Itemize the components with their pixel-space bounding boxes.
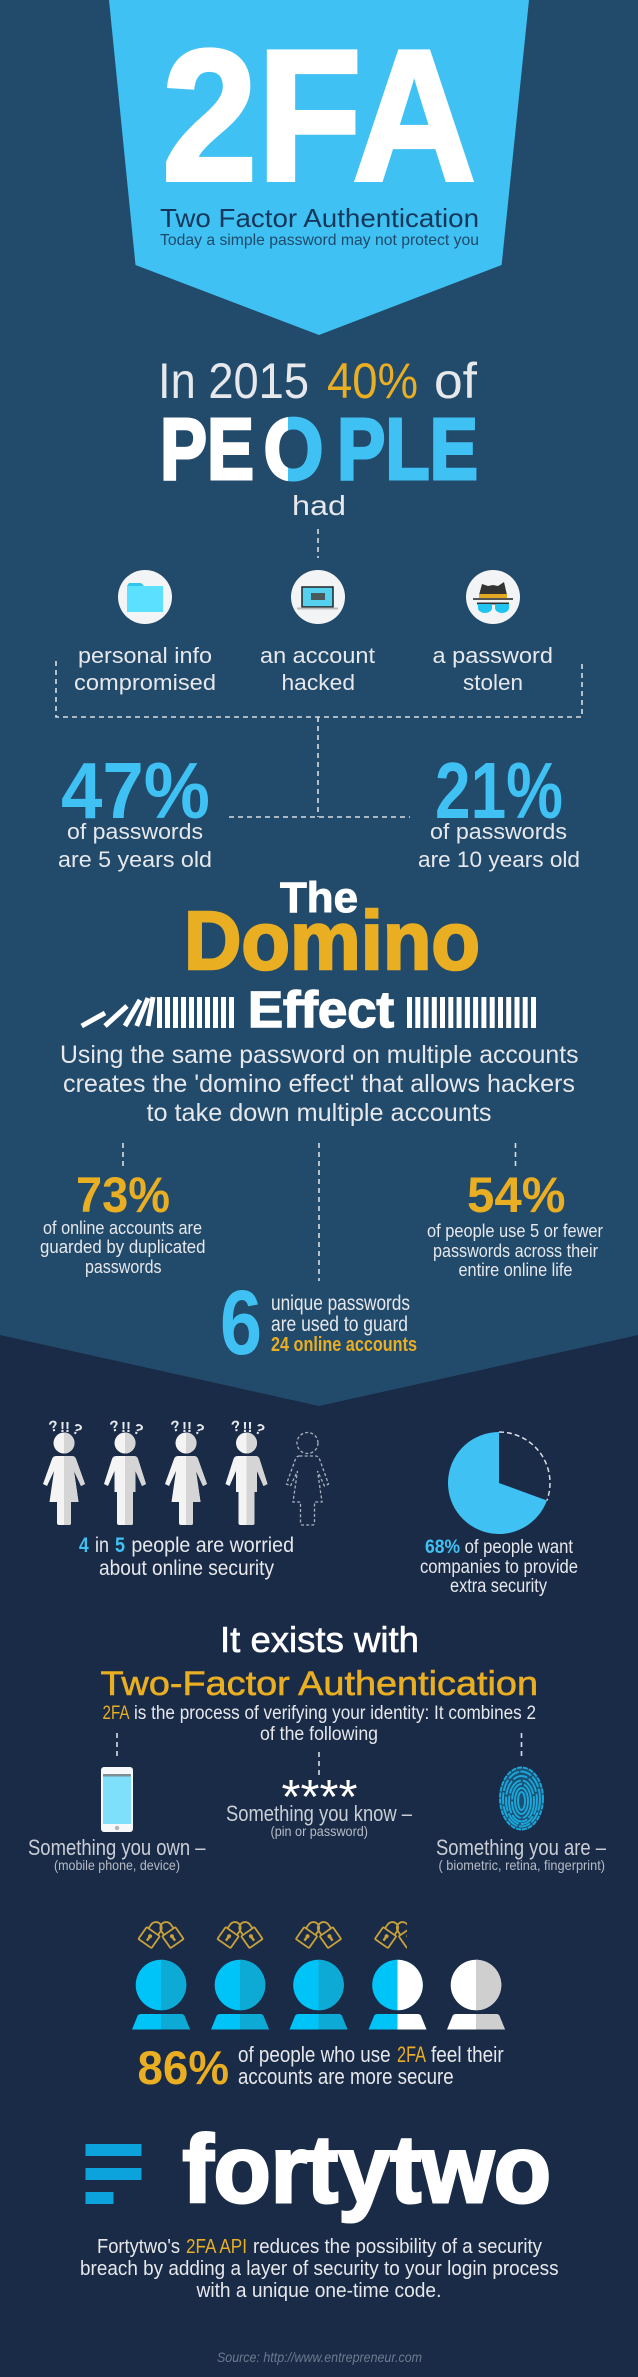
stat: 86% (138, 2041, 504, 2094)
stat: 73% (40, 1167, 206, 1277)
icon: fingerprint (500, 1768, 543, 1830)
stat: 86%: 2FA (397, 2042, 426, 2067)
stat: 47% (58, 746, 212, 872)
stat: 6 unique passwords: 6 (220, 1272, 262, 1374)
headline: in 2015 40% of people had: PE (160, 401, 254, 498)
stat: 21%: 21% (435, 746, 563, 835)
caption: 4 in 5: in (95, 1534, 109, 1557)
caption: 68%: extra security (450, 1576, 547, 1597)
stat: 73%: of online accounts are (43, 1218, 202, 1238)
people worried pictogram (43, 1417, 328, 1525)
heading: the domino effect: The (280, 874, 358, 922)
heading: the domino effect: Effect (248, 981, 394, 1038)
icon: folder (127, 583, 163, 612)
subtitle: Two Factor Authentication (160, 203, 479, 233)
item: an account hacked: an account (260, 643, 375, 668)
domino effect paragraph (60, 1041, 578, 1127)
caption: 4 in 5 (79, 1534, 294, 1580)
stat: 54%: entire online life (458, 1260, 572, 1280)
headline: in 2015 40% of people had (158, 353, 478, 521)
caption: 4 in 5: 4 (79, 1534, 89, 1557)
caption: 4 in 5: people are worried (131, 1534, 294, 1557)
headline: in 2015 40% of people had: O (264, 401, 324, 498)
description of 2FA (102, 1703, 536, 1745)
stat: 73%: guarded by duplicated (40, 1237, 206, 1257)
stat: 47%: are 5 years old (58, 847, 212, 872)
factor: something you are (436, 1768, 607, 1873)
pie chart 68% (448, 1432, 550, 1534)
headline: in 2015 40% of people had: of (434, 353, 477, 409)
factor: something you know: **** (282, 1771, 358, 1824)
stat: 6 unique passwords: are used to guard (271, 1313, 408, 1336)
item: a password stolen: stolen (463, 670, 523, 695)
domino effect paragraph: creates the 'domino effect' that allows hackers (63, 1070, 575, 1098)
description of 2FA: 2FA (102, 1703, 130, 1724)
heading: the domino effect: Domino (184, 894, 480, 987)
caption: 68%: companies to provide (420, 1557, 578, 1578)
stat: 54%: passwords across their (433, 1241, 598, 1261)
stat: 47%: 47% (61, 746, 210, 835)
people pictogram 86% (132, 1960, 505, 2030)
dominoes falling, left (82, 997, 234, 1028)
header banner (109, 0, 529, 335)
headline: in 2015 40% of people had: PLE (337, 401, 478, 498)
stat: 86%: 86% (138, 2041, 229, 2094)
item: an account hacked (260, 570, 375, 695)
fortytwo paragraph: Fortytwo's (97, 2236, 180, 2258)
dashed bracket connector (56, 661, 582, 817)
factor: something you are: Something you are – (436, 1835, 607, 1860)
factor: something you own: (mobile phone, device) (54, 1857, 180, 1873)
background upper panel (0, 0, 638, 1410)
stat: 6 unique passwords (220, 1272, 417, 1374)
heading: the domino effect (184, 874, 480, 1038)
padlock icons (138, 1918, 420, 1948)
item: personal info compromised (74, 570, 216, 695)
fortytwo paragraph: reduces the possibility of a security (253, 2236, 542, 2258)
caption: 68% (420, 1537, 578, 1597)
stat: 86%: feel their (431, 2042, 504, 2067)
person 3 secure (290, 1960, 348, 2030)
description of 2FA: is the process of verifying your identity: It combines 2 (134, 1703, 536, 1724)
headline: in 2015 40% of people had: had (292, 490, 346, 521)
background lower panel (0, 1335, 638, 2377)
stat: 73%: passwords (85, 1257, 162, 1277)
connector from headline (317, 529, 319, 558)
item: personal info compromised: compromised (74, 670, 216, 695)
factor: something you own (28, 1767, 206, 1873)
heading: it exists with two-factor authentication (100, 1619, 538, 1703)
description of 2FA: of the following (260, 1724, 378, 1745)
person 1 (43, 1417, 85, 1525)
three dashed connectors (123, 1143, 516, 1281)
stat: 47%: of passwords (67, 819, 203, 844)
person 1 secure (132, 1960, 190, 2030)
person 2 secure (211, 1960, 269, 2030)
factor: something you are: ( biometric, retina, fingerprint) (438, 1857, 605, 1873)
factor: something you know: (pin or password) (270, 1823, 368, 1839)
person 4 (226, 1417, 268, 1525)
headline: in 2015 40% of people had: O (264, 401, 324, 498)
icon: laptop (297, 587, 338, 610)
caption: 68%: of people want (465, 1537, 574, 1558)
person 2 (104, 1417, 146, 1525)
heading: it exists with two-factor authentication: It exists with (220, 1619, 419, 1660)
icon: phone (101, 1767, 133, 1832)
caption: 4 in 5: 5 (115, 1534, 125, 1557)
person 5 dashed (286, 1432, 328, 1525)
factor: something you know (226, 1771, 413, 1839)
title 2FA: 2FA (162, 11, 476, 220)
caption: 4 in 5: about online security (99, 1557, 274, 1580)
stat: 54%: 54% (467, 1167, 566, 1223)
fortytwo paragraph: breach by adding a layer of security to your login process (80, 2258, 559, 2280)
item: an account hacked: hacked (282, 670, 355, 695)
stat: 6 unique passwords: unique passwords (271, 1292, 410, 1315)
person 3 (165, 1417, 207, 1525)
fortytwo paragraph: with a unique one-time code. (196, 2280, 441, 2302)
icon: spy (473, 582, 513, 613)
stat: 73%: 73% (76, 1167, 170, 1223)
item: a password stolen (432, 570, 553, 695)
headline: in 2015 40% of people had: 40% (327, 353, 418, 409)
fortytwo paragraph: 2FA API (186, 2236, 247, 2258)
stat: 21%: of passwords (430, 819, 567, 844)
logo bars (86, 2144, 142, 2204)
domino effect paragraph: Using the same password on multiple accounts (60, 1041, 578, 1069)
item: personal info compromised: personal info (78, 643, 212, 668)
factor: something you know: Something you know – (226, 1801, 413, 1826)
stat: 86%: of people who use (238, 2042, 391, 2067)
person 5 not secure (447, 1960, 505, 2030)
person 4 partly secure (368, 1960, 426, 2030)
logo: fortytwo: fortytwo (182, 2116, 551, 2223)
stat: 21% (418, 746, 580, 872)
item: a password stolen: a password (432, 643, 553, 668)
domino effect paragraph: to take down multiple accounts (146, 1099, 492, 1127)
heading: it exists with two-factor authentication: Two-Factor Authentication (100, 1665, 538, 1703)
caption: 68%: 68% (425, 1537, 460, 1558)
fortytwo paragraph (80, 2236, 559, 2302)
stat: 21%: are 10 years old (418, 847, 580, 872)
stat: 54% (427, 1167, 603, 1280)
factor: something you own: Something you own – (28, 1835, 206, 1860)
stat: 54%: of people use 5 or fewer (427, 1221, 603, 1241)
source: Source: http://www.entrepreneur.com (217, 2349, 422, 2365)
dominoes standing, right (407, 997, 536, 1028)
tagline: Today a simple password may not protect you (160, 232, 479, 249)
headline: in 2015 40% of people had: In 2015 (158, 353, 309, 409)
stat: 6 unique passwords: 24 online accounts (271, 1334, 417, 1356)
dashed connectors to factors (117, 1733, 522, 1778)
stat: 86%: accounts are more secure (238, 2064, 454, 2089)
